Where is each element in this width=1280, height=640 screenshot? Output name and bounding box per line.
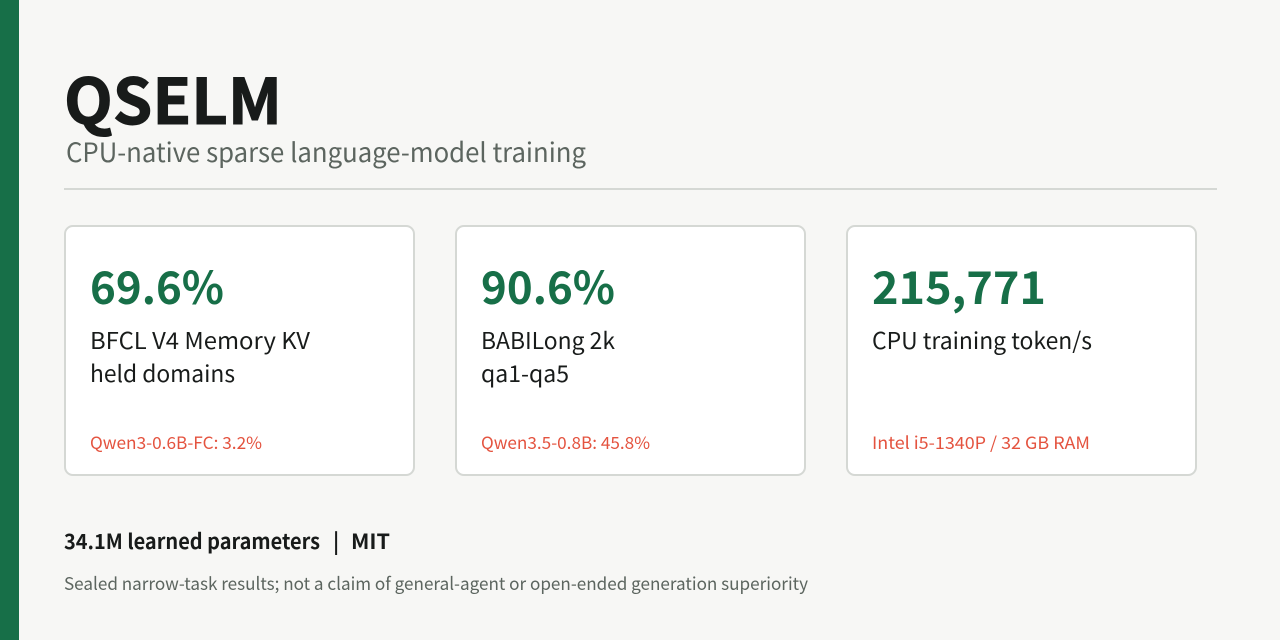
header divider bbox=[64, 188, 1217, 190]
metric label: CPU training token/s bbox=[872, 322, 1092, 356]
metric label: held domains bbox=[90, 355, 235, 389]
metric value: 69.6% bbox=[90, 252, 224, 317]
panel: CPU throughput metric bbox=[847, 226, 1196, 475]
metric label: qa1-qa5 bbox=[481, 355, 569, 389]
title: QSELM bbox=[64, 52, 282, 143]
metric label: BFCL V4 Memory KV bbox=[90, 322, 311, 356]
comparison note: Qwen3.5-0.8B: 45.8% bbox=[481, 429, 650, 454]
metric value: 90.6% bbox=[481, 252, 615, 317]
panel: BABILong metric bbox=[456, 226, 805, 475]
disclaimer: Sealed narrow-task results; not a claim of general-agent or open-ended generation superiority bbox=[64, 571, 808, 596]
comparison note: Qwen3-0.6B-FC: 3.2% bbox=[90, 429, 262, 454]
panel: BFCL V4 metric bbox=[65, 226, 414, 475]
hardware note: Intel i5-1340P / 32 GB RAM bbox=[872, 429, 1090, 454]
metric label bbox=[90, 322, 311, 389]
parameters and license line: MIT bbox=[351, 526, 390, 556]
parameters and license line: | bbox=[333, 526, 339, 556]
subtitle: CPU-native sparse language-model training bbox=[66, 131, 586, 170]
parameters and license line: 34.1M learned parameters bbox=[64, 526, 320, 556]
accent bar bbox=[0, 0, 19, 640]
metric label bbox=[481, 322, 615, 389]
metric value: 215,771 bbox=[872, 252, 1046, 317]
metric label: BABILong 2k bbox=[481, 322, 615, 356]
